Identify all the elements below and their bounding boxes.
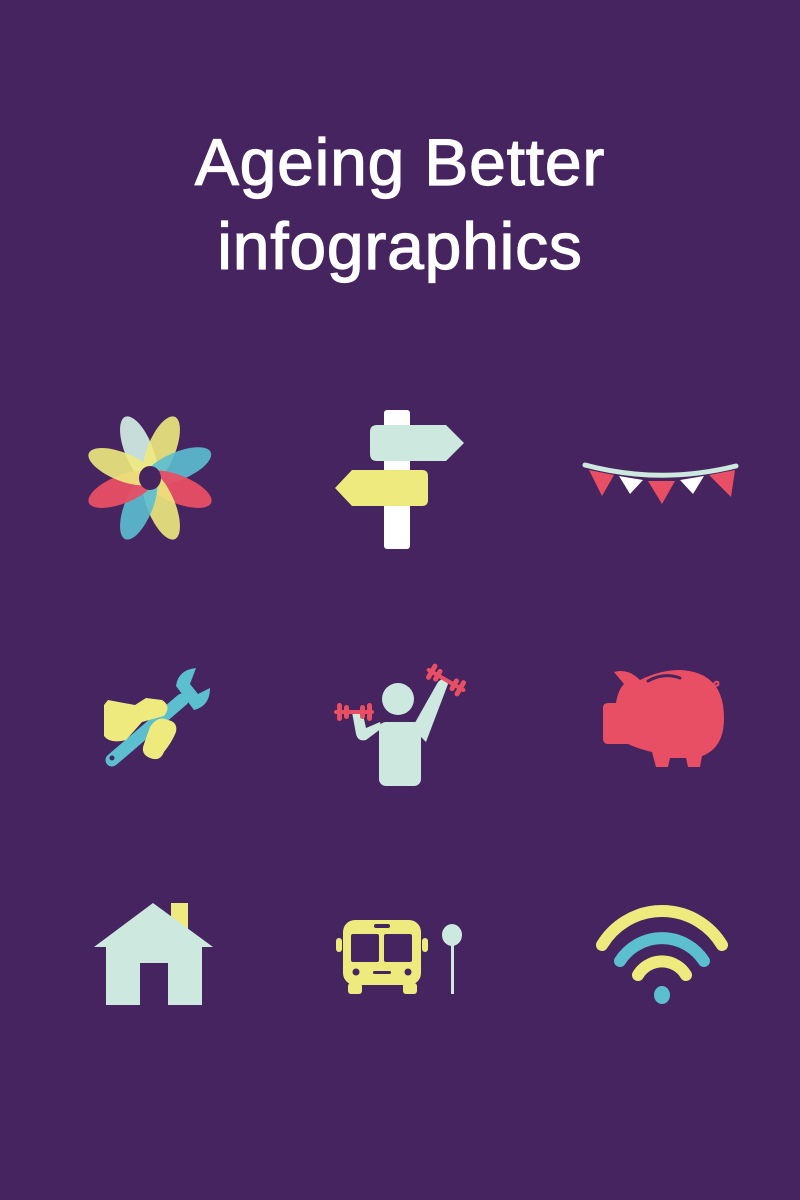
- title: Ageing Better: [195, 125, 605, 199]
- icon: person with dumbbells: [334, 661, 470, 786]
- icon: flower: [84, 412, 216, 544]
- icon: bus stop: [336, 920, 462, 994]
- icon: wifi: [602, 911, 722, 1004]
- icon: signpost: [335, 410, 464, 549]
- title: [194, 125, 605, 284]
- icon: bunting: [585, 465, 736, 504]
- icon: piggy bank: [603, 670, 724, 767]
- icon: house: [94, 903, 213, 1005]
- title: infographics: [217, 209, 583, 283]
- icon: hand with wrench: [104, 668, 210, 760]
